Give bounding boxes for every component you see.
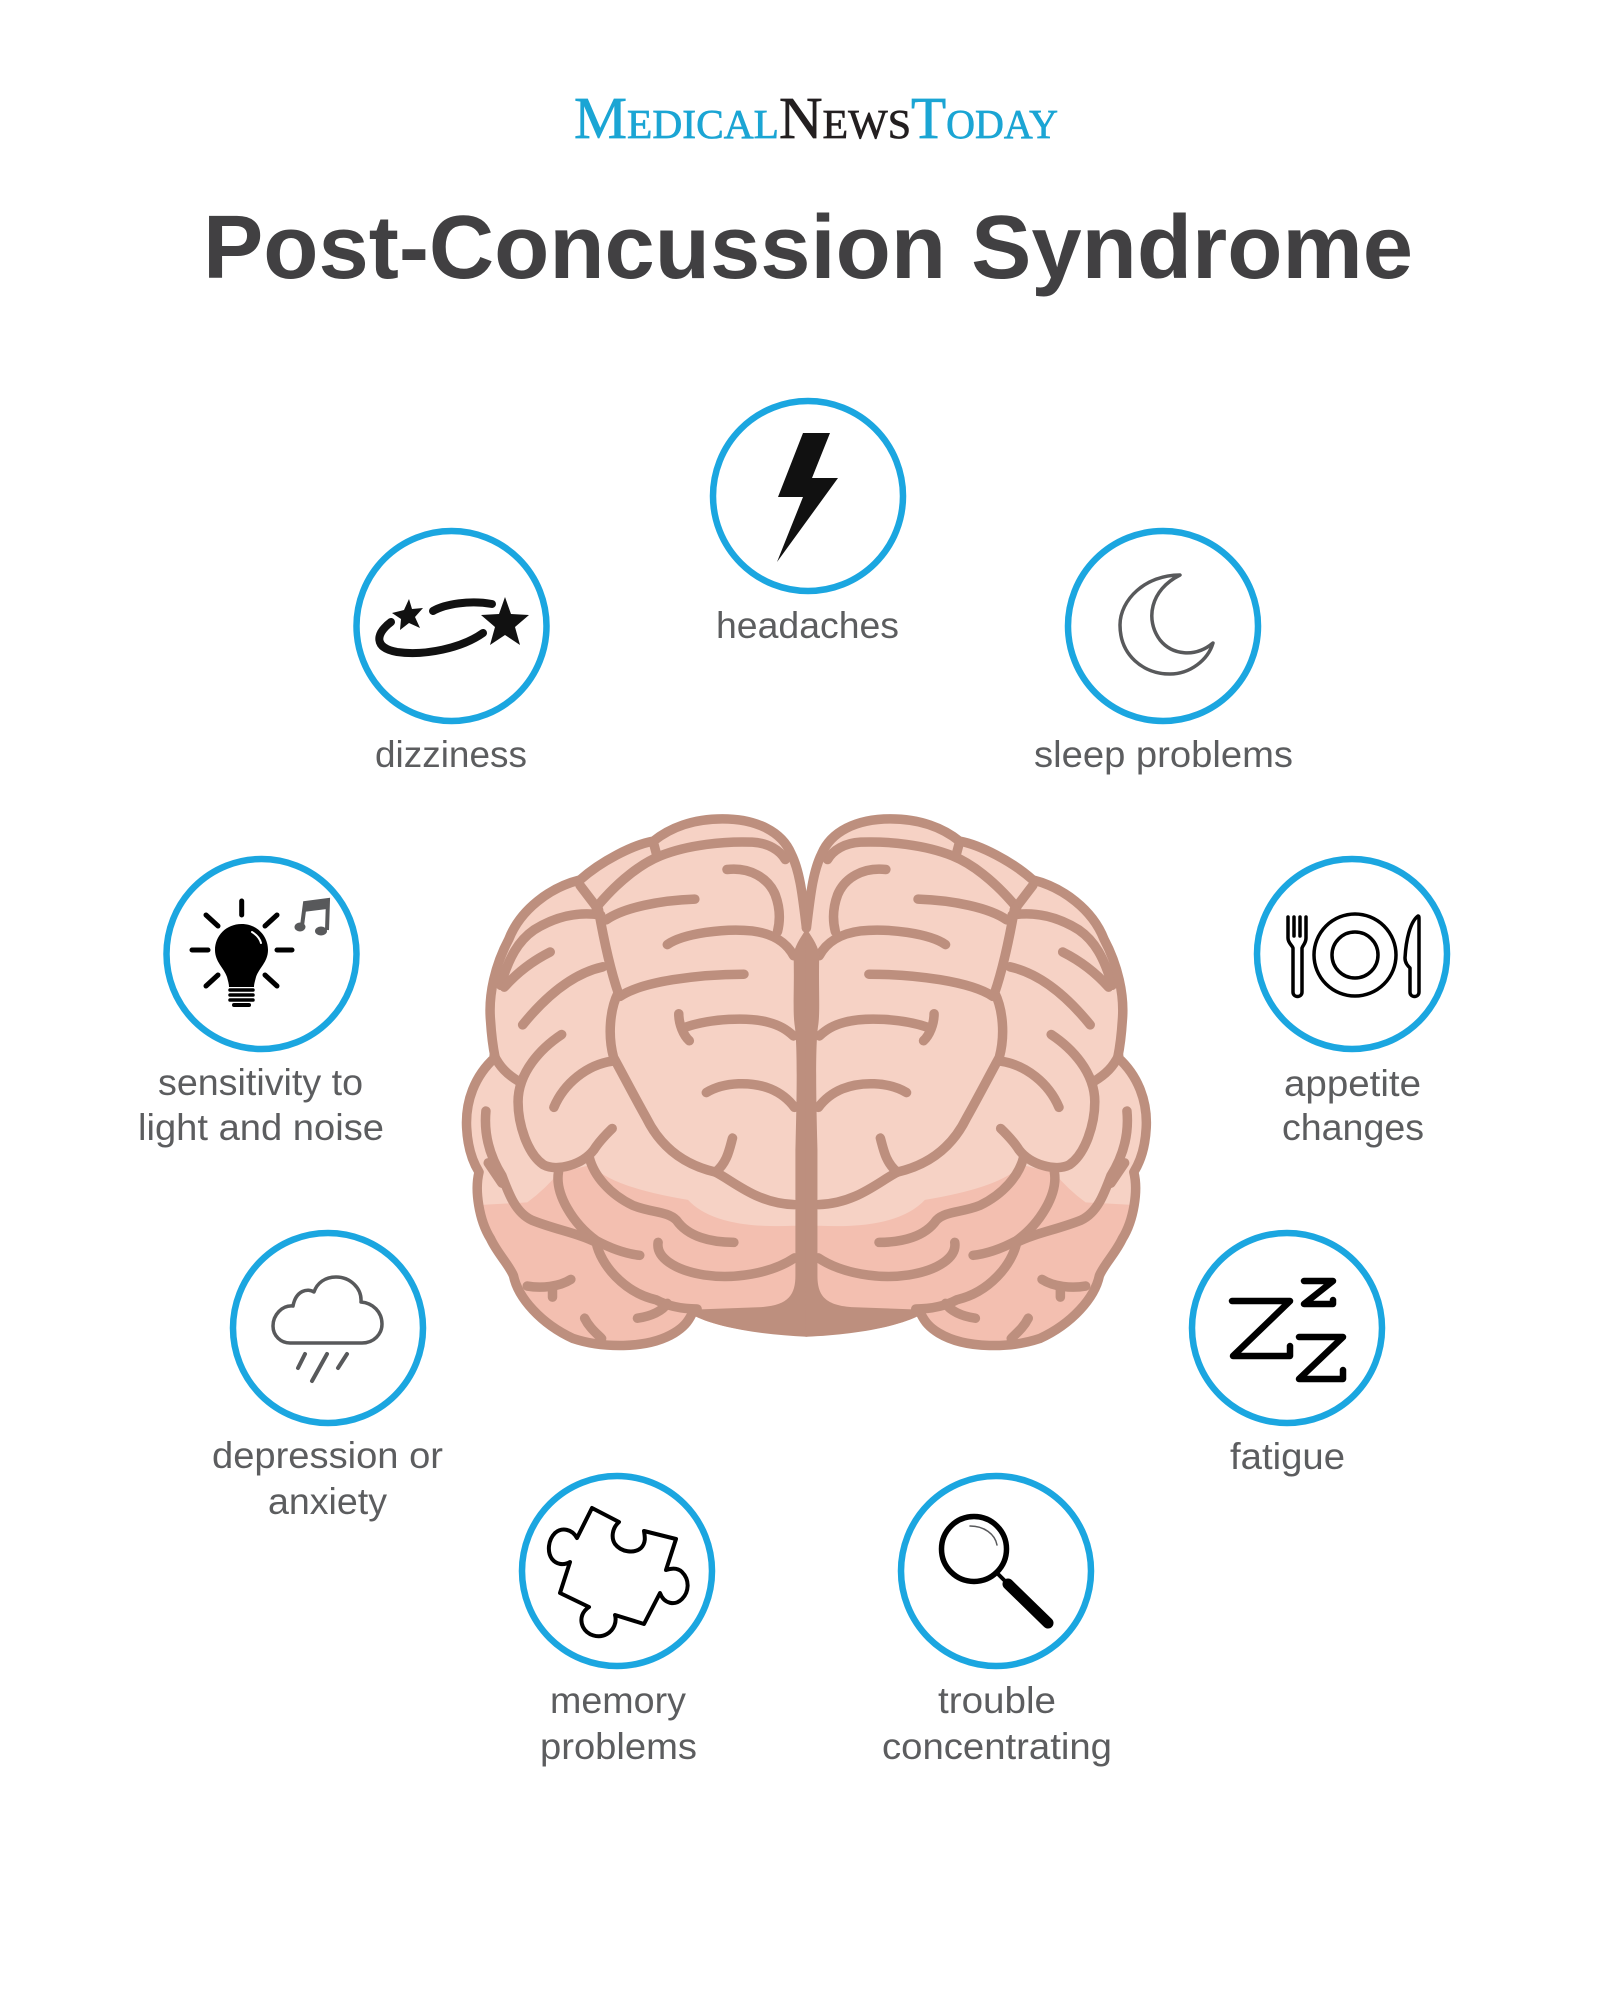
ring bbox=[233, 1233, 423, 1423]
icon: zzz bbox=[1232, 1281, 1343, 1379]
label: memory bbox=[550, 1680, 687, 1721]
icon: rain cloud bbox=[273, 1277, 382, 1381]
label: appetite bbox=[1284, 1063, 1421, 1104]
ring bbox=[356, 531, 546, 721]
label: depression or bbox=[212, 1435, 443, 1476]
symptom: sensitivity to light and noise bbox=[138, 859, 384, 1148]
label: sleep problems bbox=[1034, 734, 1293, 775]
symptom: appetite changes bbox=[1257, 859, 1447, 1148]
label bbox=[540, 1680, 697, 1767]
ring bbox=[901, 1476, 1091, 1666]
right hemisphere bbox=[806, 819, 1154, 1357]
title: Post-Concussion Syndrome bbox=[203, 198, 1413, 298]
symptom: fatigue bbox=[1192, 1233, 1382, 1477]
label bbox=[212, 1435, 443, 1522]
icon: lightning bolt bbox=[777, 433, 838, 562]
ring bbox=[1257, 859, 1447, 1049]
ring bbox=[1068, 531, 1258, 721]
icon: puzzle piece bbox=[549, 1508, 688, 1636]
symptom: sleep problems bbox=[1034, 531, 1293, 775]
ring bbox=[166, 859, 356, 1049]
label bbox=[1282, 1063, 1424, 1148]
label: problems bbox=[540, 1726, 697, 1767]
label bbox=[882, 1680, 1112, 1767]
label: anxiety bbox=[268, 1481, 388, 1522]
icon: magnifying glass bbox=[942, 1516, 1048, 1623]
symptom: depression or anxiety bbox=[212, 1233, 443, 1522]
symptom: headaches bbox=[713, 401, 903, 646]
label: concentrating bbox=[882, 1726, 1112, 1767]
icon: light bulb bbox=[192, 901, 292, 1005]
label: trouble bbox=[938, 1680, 1056, 1721]
ring bbox=[1192, 1233, 1382, 1423]
symptom: memory problems bbox=[522, 1476, 712, 1767]
label: changes bbox=[1282, 1107, 1424, 1148]
logo: Medical News Today: News bbox=[779, 85, 911, 151]
logo: Medical News Today bbox=[574, 85, 1058, 151]
label: sensitivity to bbox=[158, 1062, 363, 1103]
label: headaches bbox=[716, 605, 899, 646]
label: fatigue bbox=[1230, 1436, 1345, 1477]
logo: Medical News Today: Today bbox=[911, 85, 1058, 151]
icon: crescent moon bbox=[1120, 575, 1213, 674]
ring bbox=[713, 401, 903, 591]
icon: stars orbit bbox=[379, 597, 529, 653]
label: dizziness bbox=[375, 734, 527, 775]
ring bbox=[522, 1476, 712, 1666]
icon: music note bbox=[294, 900, 328, 936]
symptom: dizziness bbox=[356, 531, 546, 775]
icon: plate, fork and knife bbox=[1288, 914, 1419, 996]
symptom: trouble concentrating bbox=[882, 1476, 1112, 1767]
label: light and noise bbox=[138, 1107, 384, 1148]
label bbox=[138, 1062, 384, 1148]
left hemisphere bbox=[458, 819, 807, 1357]
logo: Medical News Today: Medical bbox=[574, 85, 779, 151]
brain illustration bbox=[462, 814, 1152, 1350]
